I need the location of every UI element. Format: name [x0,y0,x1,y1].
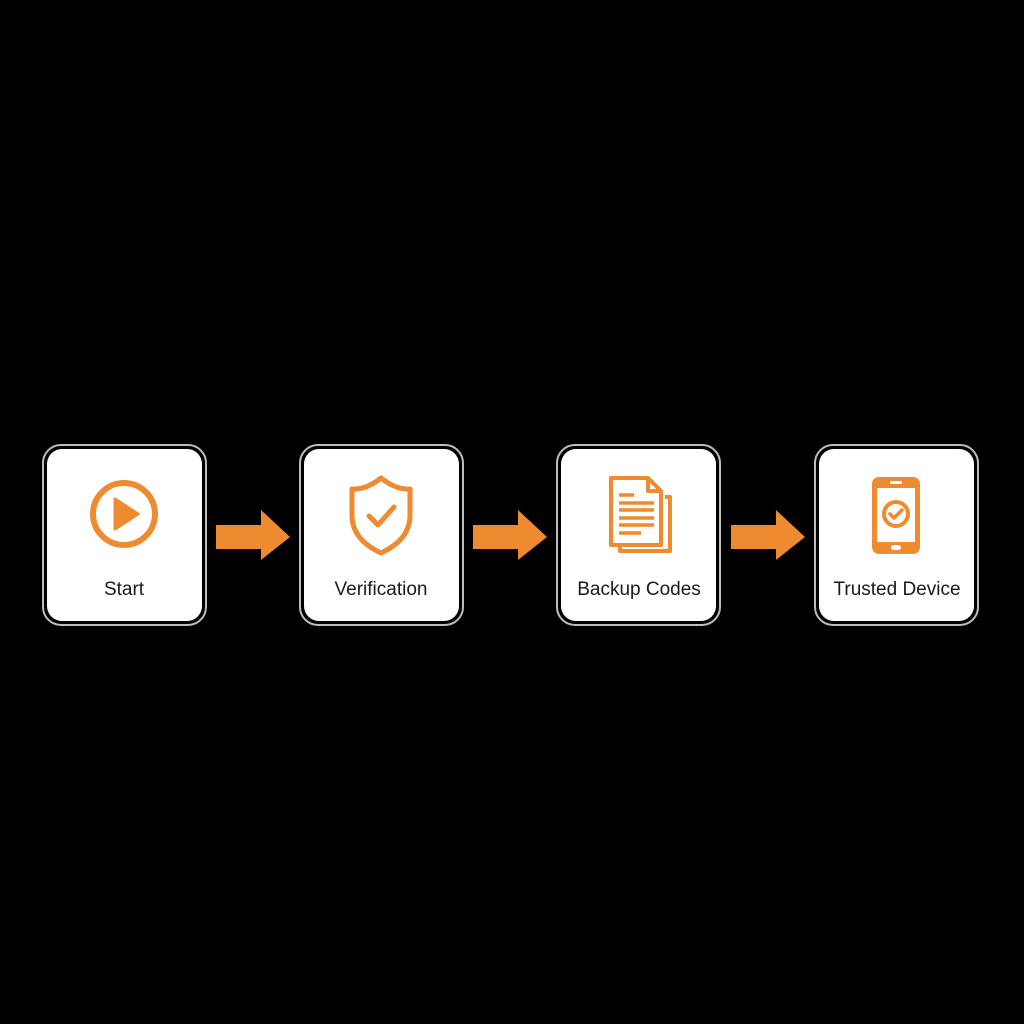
label: Start: Start [104,579,145,600]
step: Start [43,445,206,625]
step: Verification [300,445,463,625]
arrow 1 [216,510,290,560]
icon: phone [872,477,920,554]
label: Backup Codes: Backup Codes [577,579,701,600]
icon: play [93,483,155,545]
step: Backup Codes [557,445,720,625]
arrow 3 [731,510,805,560]
icon: shield [352,478,410,553]
icon: documents [611,478,670,551]
label: Verification: Verification [335,579,427,600]
arrow 2 [473,510,547,560]
label: Trusted Device: Trusted Device [833,579,961,600]
step: Trusted Device [815,445,978,625]
